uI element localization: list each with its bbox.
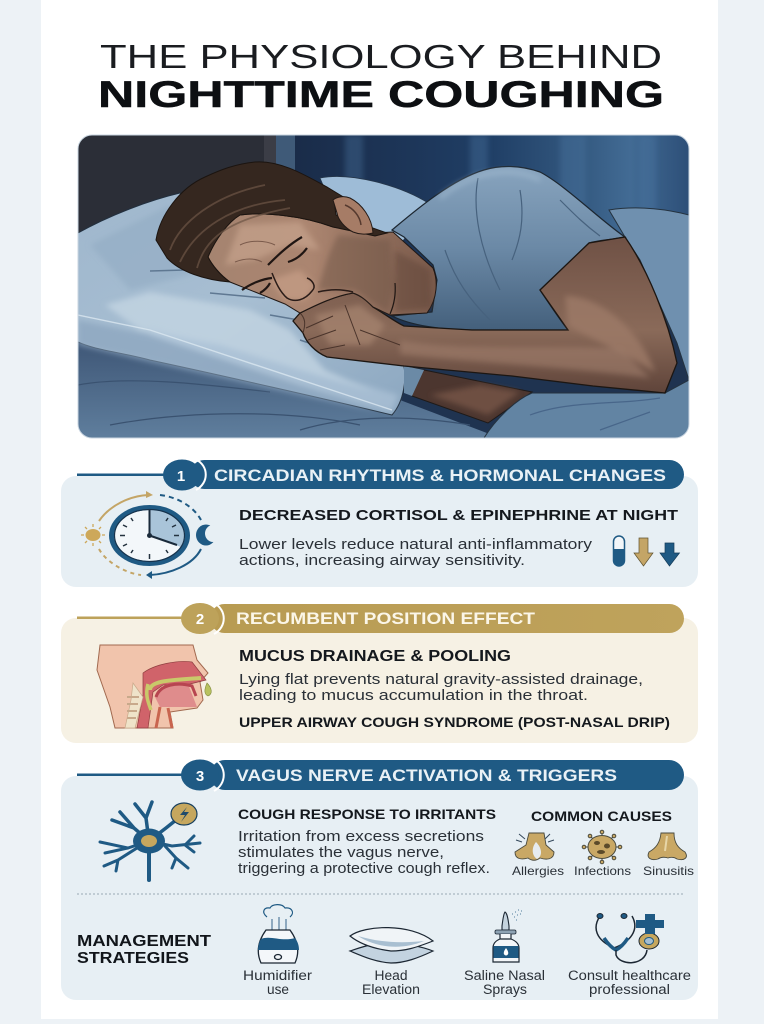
- arm and hand: [293, 237, 677, 393]
- strategy: consult healthcare professional: [568, 914, 691, 997]
- label: Consult healthcare: [568, 968, 691, 983]
- body text: actions, increasing airway sensitivity.: [239, 553, 525, 569]
- body text: [239, 537, 593, 569]
- pillow: [78, 193, 405, 415]
- icon: sinusitis nose: [648, 833, 686, 860]
- title: THE PHYSIOLOGY BEHIND: [100, 38, 662, 75]
- section banner: 3: [196, 768, 204, 785]
- shirt: [392, 166, 625, 330]
- section banner: [163, 460, 684, 490]
- back blanket: [609, 208, 689, 380]
- body text: [239, 671, 643, 704]
- common causes: [512, 808, 694, 878]
- icon: humidifier: [258, 905, 299, 963]
- body text: stimulates the vagus nerve,: [238, 845, 444, 861]
- section banner: CIRCADIAN RHYTHMS & HORMONAL CHANGES: [214, 467, 666, 485]
- strategy: saline nasal sprays: [464, 910, 545, 997]
- panel: section 2 recumbent position: [61, 603, 698, 743]
- back pillow: [320, 177, 430, 245]
- label: [243, 968, 313, 997]
- label: use: [267, 982, 289, 997]
- icon: nasal spray bottle: [493, 910, 522, 962]
- label: [464, 968, 545, 997]
- hair: [156, 162, 387, 282]
- icon: allergies nose: [515, 833, 554, 860]
- icon: nerve cell with lightning bolt: [100, 802, 200, 880]
- icon: infection virus: [582, 830, 622, 864]
- connector line: [77, 774, 187, 776]
- label: [568, 968, 691, 997]
- section banner: VAGUS NERVE ACTIVATION & TRIGGERS: [236, 767, 617, 785]
- title: NIGHTTIME COUGHING: [98, 74, 664, 115]
- management strategies heading: MANAGEMENT: [77, 933, 212, 950]
- bed sheet: [78, 340, 500, 438]
- face and neck: [208, 214, 436, 315]
- ear: [333, 197, 373, 234]
- management strategies heading: [77, 933, 212, 967]
- icon: clock with day and night cycle: [81, 491, 221, 579]
- heading: COMMON CAUSES: [531, 808, 672, 824]
- label: Saline Nasal: [464, 968, 545, 983]
- section banner: [181, 603, 684, 634]
- lower torso: [404, 366, 532, 423]
- connector line: [77, 616, 187, 619]
- management strategies heading: STRATEGIES: [77, 950, 189, 967]
- section banner: 1: [177, 468, 185, 485]
- front blanket: [484, 380, 689, 438]
- body text: triggering a protective cough reflex.: [238, 861, 490, 877]
- strategy: head elevation: [350, 928, 433, 997]
- section banner: [181, 759, 684, 791]
- panel background: [61, 618, 698, 743]
- section banner: 2: [196, 611, 204, 628]
- body text: leading to mucus accumulation in the throat.: [239, 687, 588, 704]
- icon: stethoscope and medical cross: [596, 914, 664, 963]
- label: Head: [374, 968, 408, 983]
- cause labels: Sinusitis: [643, 864, 694, 878]
- label: Sprays: [483, 982, 527, 997]
- secondary heading: UPPER AIRWAY COUGH SYNDROME (POST-NASAL DRIP): [239, 714, 670, 730]
- cause labels: Allergies: [512, 864, 564, 878]
- icon: head cross-section anatomy: [97, 645, 211, 728]
- icon: stacked pillows: [350, 928, 433, 963]
- panel background: [61, 776, 698, 1000]
- title: [98, 38, 664, 115]
- label: Elevation: [362, 982, 420, 997]
- subheading: COUGH RESPONSE TO IRRITANTS: [238, 806, 496, 822]
- body text: Lying flat prevents natural gravity-assisted drainage,: [239, 671, 643, 688]
- label: professional: [589, 982, 670, 997]
- label: [362, 968, 420, 997]
- subheading: MUCUS DRAINAGE & POOLING: [239, 648, 511, 665]
- cause labels: Infections: [574, 864, 631, 878]
- body text: Lower levels reduce natural anti-inflammatory: [239, 537, 593, 553]
- subheading: DECREASED CORTISOL & EPINEPHRINE AT NIGHT: [239, 507, 678, 524]
- illustration: man coughing in bed: [78, 135, 689, 438]
- connector line: [77, 474, 167, 476]
- body text: [238, 829, 490, 877]
- panel background: [61, 476, 698, 587]
- strategy: humidifier: [243, 905, 313, 997]
- section banner: RECUMBENT POSITION EFFECT: [236, 610, 535, 628]
- panel: section 1 circadian rhythms: [61, 460, 698, 587]
- photo outline: [78, 135, 689, 438]
- dotted divider: [77, 893, 685, 895]
- cause labels: [512, 864, 694, 878]
- label: Humidifier: [243, 968, 313, 983]
- icon: low level vial and down arrows: [614, 536, 680, 566]
- panel: section 3 vagus nerve and management: [61, 759, 698, 1000]
- body text: Irritation from excess secretions: [238, 829, 484, 845]
